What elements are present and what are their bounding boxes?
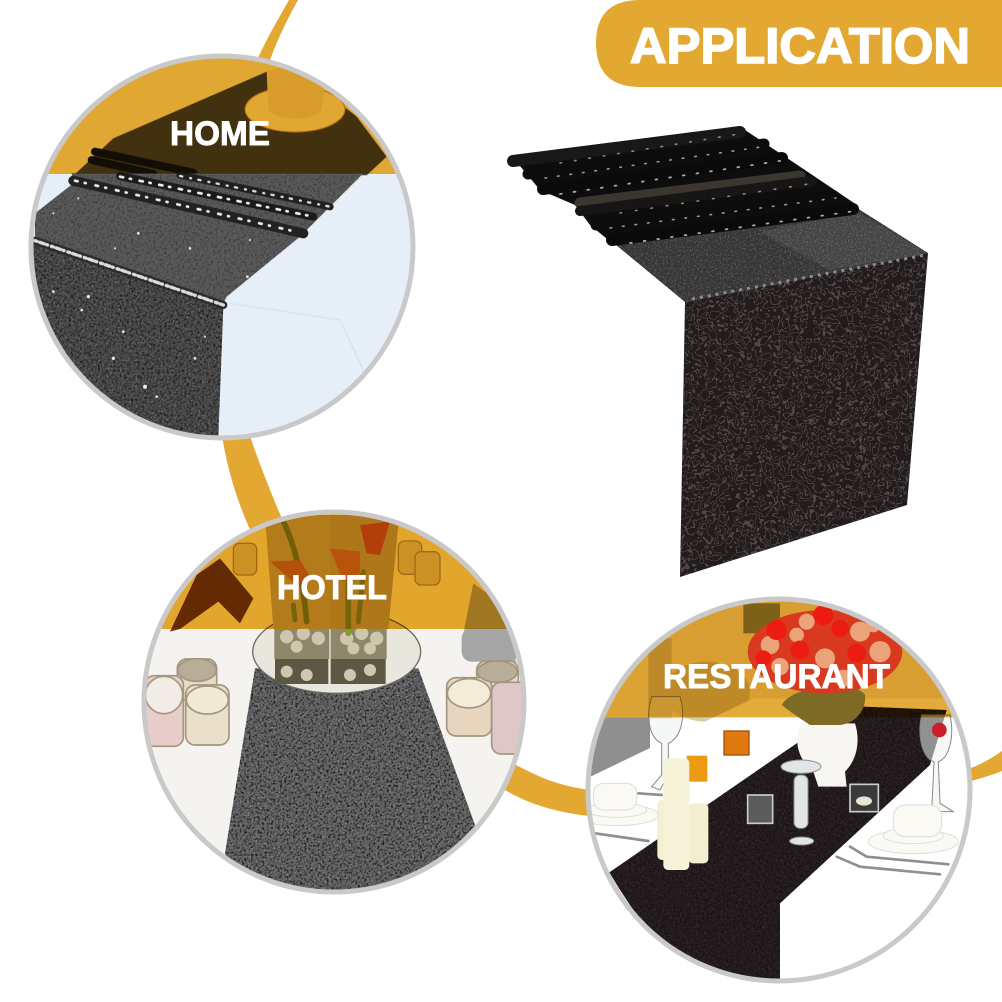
sparkling edges and pleats: [35, 175, 330, 305]
product: black sequin table runner: [513, 130, 933, 580]
white vase: [797, 723, 858, 787]
gold band overlay: [605, 602, 953, 718]
home label: HOME: [170, 115, 270, 153]
glass vases: [265, 515, 399, 684]
runner hanging panel: [675, 250, 933, 580]
front drop: [30, 238, 223, 437]
header title: APPLICATION: [630, 18, 970, 74]
panel: hotel: [140, 505, 532, 894]
restaurant label: RESTAURANT: [663, 658, 890, 696]
hotel label: HOTEL: [277, 569, 387, 607]
runner folded pleats: [513, 130, 857, 243]
gold connecting curve: [222, 0, 1002, 816]
right plate and cup: [868, 805, 958, 854]
gold band overlay: [48, 58, 396, 174]
scattered sparkles: [52, 197, 251, 398]
crystal candlestick: [781, 760, 821, 845]
panel: restaurant: [575, 595, 980, 995]
grey wall lower left: [580, 717, 650, 782]
table runner: [225, 668, 475, 892]
tea glass holders: [748, 784, 878, 823]
runner flat top: [610, 205, 930, 305]
leaves: [782, 686, 865, 725]
calla lily stems and flowers: [270, 522, 390, 633]
back wall shading: [606, 602, 944, 722]
wine glasses: [649, 697, 953, 812]
silver vase right: [462, 583, 518, 663]
back runner: [75, 72, 387, 175]
picture frame: [170, 558, 253, 632]
background candles: [233, 541, 440, 585]
wine in glass: [932, 723, 947, 737]
saucer and cup: [245, 69, 345, 132]
candle pillars: [657, 758, 708, 870]
tablecloth crease: [230, 303, 363, 370]
cutlery: [595, 793, 948, 874]
flat runner: [35, 173, 363, 307]
gold band overlay: [161, 514, 507, 629]
candle holders right: [447, 661, 532, 754]
hotel scene photo: [140, 505, 532, 893]
restaurant scene photo: [591, 602, 959, 978]
mirror plate: [253, 610, 421, 693]
back pleats: [92, 152, 193, 174]
panel: home: [20, 50, 420, 440]
flower bouquet: [748, 605, 902, 693]
table top: [590, 698, 954, 779]
orange candle cubes: [687, 731, 749, 782]
sequin runner: [609, 707, 947, 980]
home scene photo: [34, 58, 396, 436]
candle holders left: [145, 659, 229, 746]
left plate and cup: [591, 783, 659, 826]
header pill: application: [596, 0, 1002, 87]
